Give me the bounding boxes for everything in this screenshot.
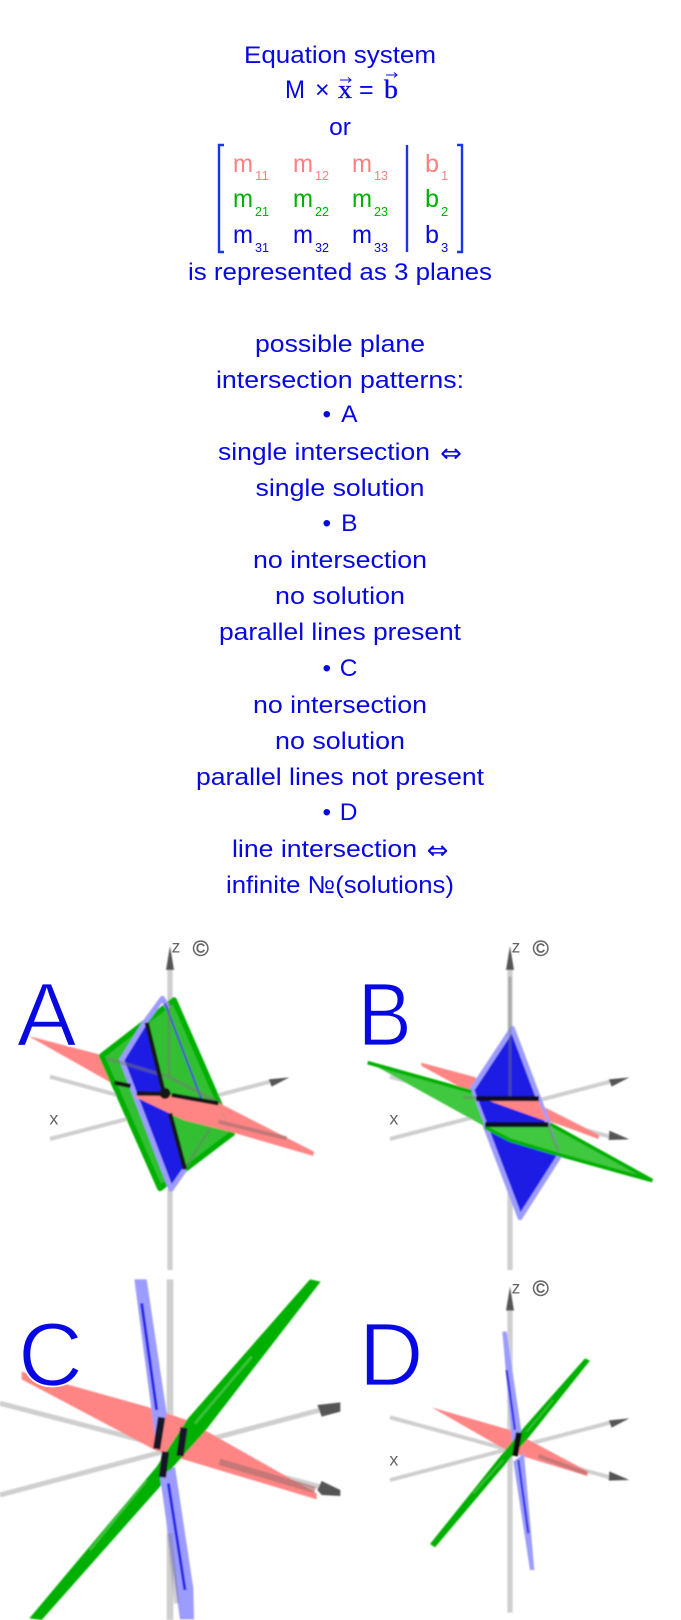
text block: possible intersection patterns: single solution	[256, 475, 424, 502]
plane: red	[22, 1372, 317, 1499]
matrix row 2: 22	[315, 204, 329, 219]
text: is represented as 3 planes: is represented as 3 planes	[188, 259, 492, 286]
text block: possible intersection patterns: intersection patterns:	[216, 367, 464, 394]
parallel lines	[476, 1099, 548, 1125]
text block: possible intersection patterns: no intersection	[253, 692, 427, 719]
axis labels	[389, 936, 549, 1129]
equation: M times x equals b	[285, 72, 398, 104]
matrix row 2: m	[293, 185, 313, 213]
equation: M times x equals b: =	[359, 76, 374, 104]
text block: possible intersection patterns: ⇔	[427, 836, 448, 866]
axis labels: ©	[193, 936, 209, 961]
intersection line	[515, 1433, 519, 1456]
text block: possible intersection patterns: line intersection	[232, 836, 417, 863]
equation: M times x equals b: ×	[315, 76, 330, 104]
matrix row 2: 21	[255, 204, 269, 219]
axis labels	[49, 936, 209, 1129]
plane: green	[102, 1000, 232, 1188]
matrix row 2: m	[233, 185, 253, 213]
axis labels: z	[512, 937, 520, 957]
plane: red, left tip	[28, 1036, 115, 1085]
axes	[50, 946, 289, 1270]
plane: red	[432, 1407, 588, 1476]
intersection lines	[157, 1417, 184, 1477]
matrix row 1: 1	[441, 168, 448, 183]
diagram C: no intersection, no parallel lines	[0, 1279, 340, 1620]
axis labels	[389, 1276, 549, 1469]
text block: possible intersection patterns: no solution	[275, 583, 405, 610]
plane: red, centre band and right tip	[133, 1095, 314, 1156]
matrix row 1: 13	[374, 168, 388, 183]
equation: M times x equals b: x	[338, 75, 352, 104]
plane: blue	[502, 1332, 522, 1457]
matrix row 2: 23	[374, 204, 388, 219]
text block: possible intersection patterns: • D	[322, 799, 358, 826]
plane: green	[430, 1358, 590, 1547]
matrix row 1: b	[425, 150, 439, 178]
heading: equation system: Equation system	[244, 42, 436, 69]
equation: M times x equals b: b	[384, 75, 398, 104]
augmented matrix	[219, 145, 462, 255]
axis labels: z	[172, 937, 180, 957]
text block: possible intersection patterns: • B	[322, 510, 358, 537]
text block: possible intersection patterns: infinite №(solutions)	[226, 872, 454, 899]
diagram D: line intersection	[359, 1276, 629, 1613]
matrix row 1	[233, 150, 448, 183]
text block: possible intersection patterns: • A	[322, 401, 358, 428]
matrix row 3: m	[233, 221, 253, 249]
intersection lines	[114, 1023, 218, 1169]
matrix row 2: m	[352, 185, 372, 213]
label A: A	[17, 966, 77, 1066]
matrix row 3	[233, 221, 448, 255]
diagram A: single intersection	[17, 936, 314, 1270]
text block: possible intersection patterns: parallel lines present	[219, 619, 461, 646]
axes	[390, 1287, 629, 1613]
text block: possible intersection patterns: ⇔	[440, 439, 462, 469]
matrix row 3: 3	[441, 240, 448, 255]
text block: possible intersection patterns: no intersection	[253, 547, 427, 574]
matrix row 1: m	[233, 150, 253, 178]
label D: D	[359, 1306, 424, 1406]
matrix row 2: b	[425, 185, 439, 213]
axes	[390, 946, 629, 1270]
label C: C	[18, 1305, 83, 1405]
axis labels: x	[389, 1449, 398, 1469]
axis labels: x	[49, 1109, 58, 1129]
matrix row 3: b	[425, 221, 439, 249]
matrix row 2: 2	[441, 204, 448, 219]
text block: possible intersection patterns	[196, 331, 484, 899]
matrix row 1: 12	[315, 168, 329, 183]
text: or: or	[329, 114, 351, 141]
matrix row 3: 33	[374, 240, 388, 255]
matrix row 3: m	[293, 221, 313, 249]
label B: B	[357, 966, 412, 1066]
axis labels: x	[389, 1109, 398, 1129]
axis labels: z	[512, 1277, 520, 1297]
text block: possible intersection patterns: no solution	[275, 728, 405, 755]
text block: possible intersection patterns: • C	[322, 655, 358, 682]
plane: blue	[134, 1279, 167, 1450]
axes	[0, 1279, 340, 1620]
equation: M times x equals b: M	[285, 76, 305, 104]
plane: green	[29, 1279, 321, 1620]
diagram B: no intersection, parallel lines	[357, 936, 652, 1270]
matrix row 2	[233, 185, 448, 219]
plane: blue	[122, 1023, 185, 1189]
plane: blue	[472, 1028, 560, 1218]
axis labels: ©	[533, 936, 549, 961]
matrix row 3: 32	[315, 240, 329, 255]
text block: possible intersection patterns: possible plane	[255, 331, 425, 358]
text block: possible intersection patterns: parallel lines not present	[196, 764, 484, 791]
text block: possible intersection patterns: single intersection	[218, 439, 430, 466]
matrix row 3: m	[352, 221, 372, 249]
matrix brackets and bar	[219, 145, 462, 252]
plane: red	[421, 1063, 599, 1139]
plane: green	[368, 1062, 652, 1180]
matrix row 1: m	[352, 150, 372, 178]
axis labels: ©	[533, 1276, 549, 1301]
matrix row 1: m	[293, 150, 313, 178]
matrix row 1: 11	[255, 168, 269, 183]
matrix row 3: 31	[255, 240, 269, 255]
